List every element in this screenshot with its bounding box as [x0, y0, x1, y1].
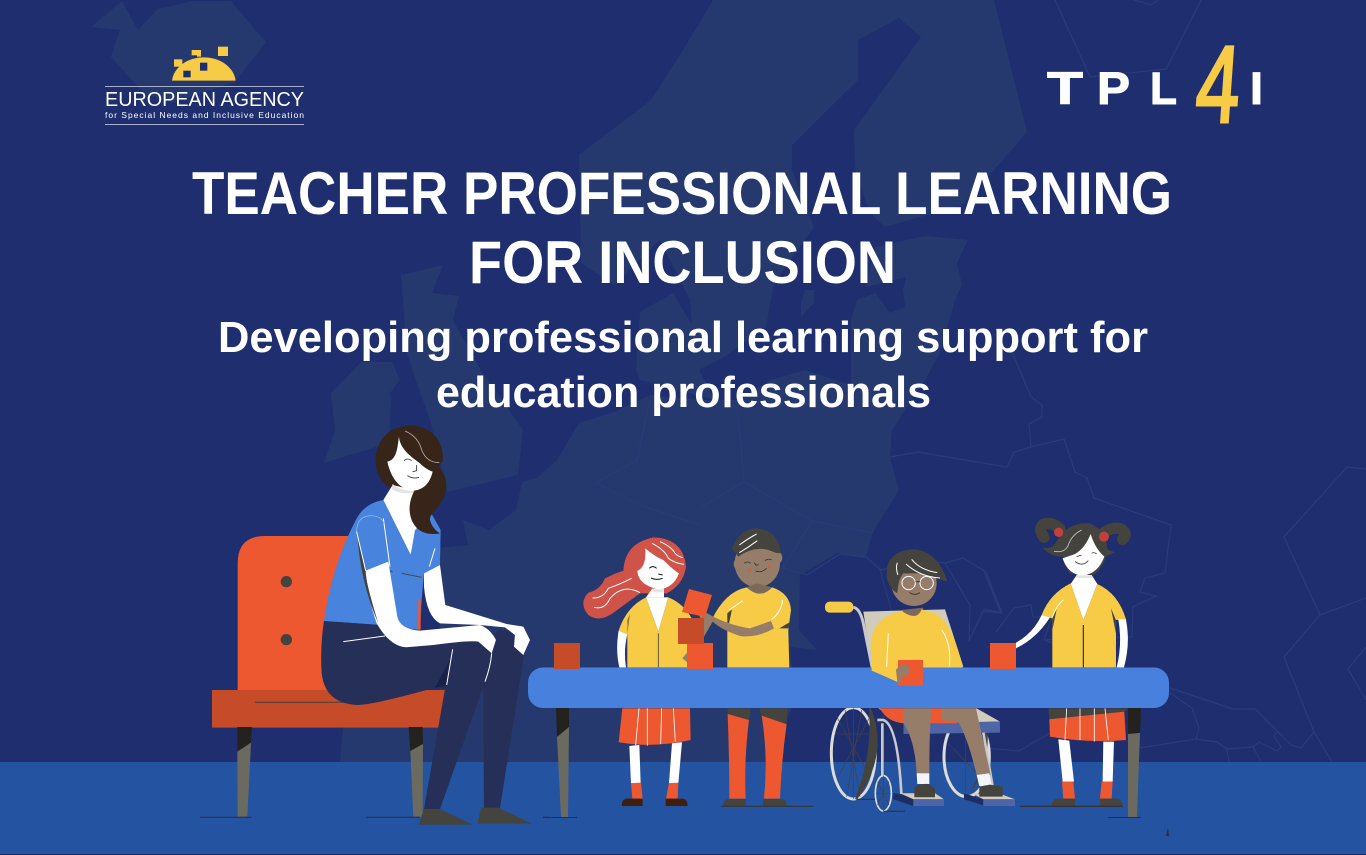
subtitle: education professionals — [436, 368, 931, 417]
small floor mark — [1166, 828, 1169, 836]
table top — [528, 668, 1169, 708]
teacher — [321, 426, 532, 825]
boy's hand holding block — [872, 660, 923, 686]
building blocks — [554, 589, 1016, 669]
logo: European Agency: for Special Needs and Inclusive Education — [105, 110, 304, 120]
boy with block — [698, 528, 814, 806]
logo: TPL4I: T — [1047, 63, 1083, 114]
logo: TPL4I: L — [1150, 63, 1177, 114]
girl with red hair — [583, 537, 692, 806]
title: FOR INCLUSION — [469, 229, 896, 296]
wheelchair — [825, 602, 1015, 811]
logo dome icon — [172, 47, 236, 81]
girl with pigtails — [1015, 523, 1128, 806]
floor — [0, 762, 1366, 855]
title — [192, 160, 1172, 296]
logo: TPL4I: I — [1250, 63, 1263, 114]
title: TEACHER PROFESSIONAL LEARNING — [192, 160, 1172, 227]
table legs — [543, 708, 1141, 818]
logo: TPL4I: 4 — [1192, 25, 1244, 146]
chair — [200, 536, 550, 817]
logo: European Agency: EUROPEAN AGENCY — [105, 89, 304, 111]
logo: TPL4I: P — [1097, 63, 1130, 114]
logo: TPL4I — [1047, 25, 1263, 146]
subtitle: Developing professional learning support for — [218, 313, 1148, 362]
boy in wheelchair — [871, 549, 1003, 797]
subtitle — [218, 313, 1148, 417]
logo: European Agency — [105, 47, 304, 125]
